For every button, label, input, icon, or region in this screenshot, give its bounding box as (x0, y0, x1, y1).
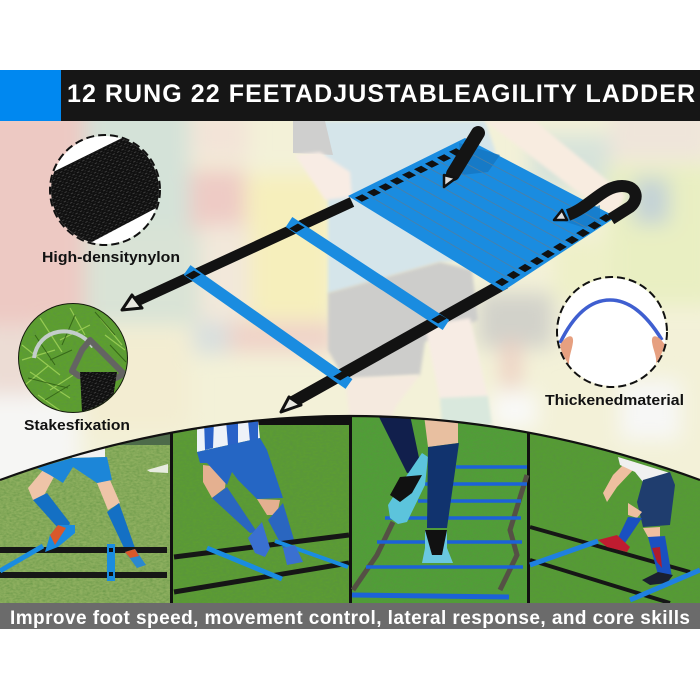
rung 2 (289, 222, 447, 325)
photo 4: side step (530, 425, 700, 603)
label: thickened material: Thickenedmaterial (545, 392, 684, 409)
caption text: Improve foot speed, movement control, lateral response, and core skills (10, 608, 690, 629)
label: nylon: High-densitynylon (42, 249, 180, 266)
stacked rungs (348, 138, 616, 291)
callout: nylon (42, 135, 180, 266)
agility ladder product (122, 133, 636, 412)
caption bar (0, 603, 700, 629)
faded player shorts (328, 262, 478, 380)
header title: 12 RUNG 22 FEETADJUSTABLEAGILITY LADDER (67, 80, 695, 108)
callout: thickened material (545, 277, 684, 409)
rung 1 (185, 270, 349, 384)
right ladder strap (281, 283, 505, 412)
faded player shirt (320, 121, 495, 294)
photo 2: forward step (173, 420, 349, 603)
photo 1: lateral step (0, 425, 170, 603)
blurred photo background (0, 100, 700, 495)
callout: stakes (18, 303, 130, 434)
left ladder strap (122, 202, 352, 310)
photo 3: ladder drill (352, 415, 527, 603)
top strap loop (444, 133, 478, 187)
arched top edge (0, 416, 700, 480)
header bar (0, 70, 700, 121)
label: stakes: Stakesfixation (24, 417, 130, 434)
right strap loop (554, 186, 636, 220)
photo strip (0, 415, 700, 603)
